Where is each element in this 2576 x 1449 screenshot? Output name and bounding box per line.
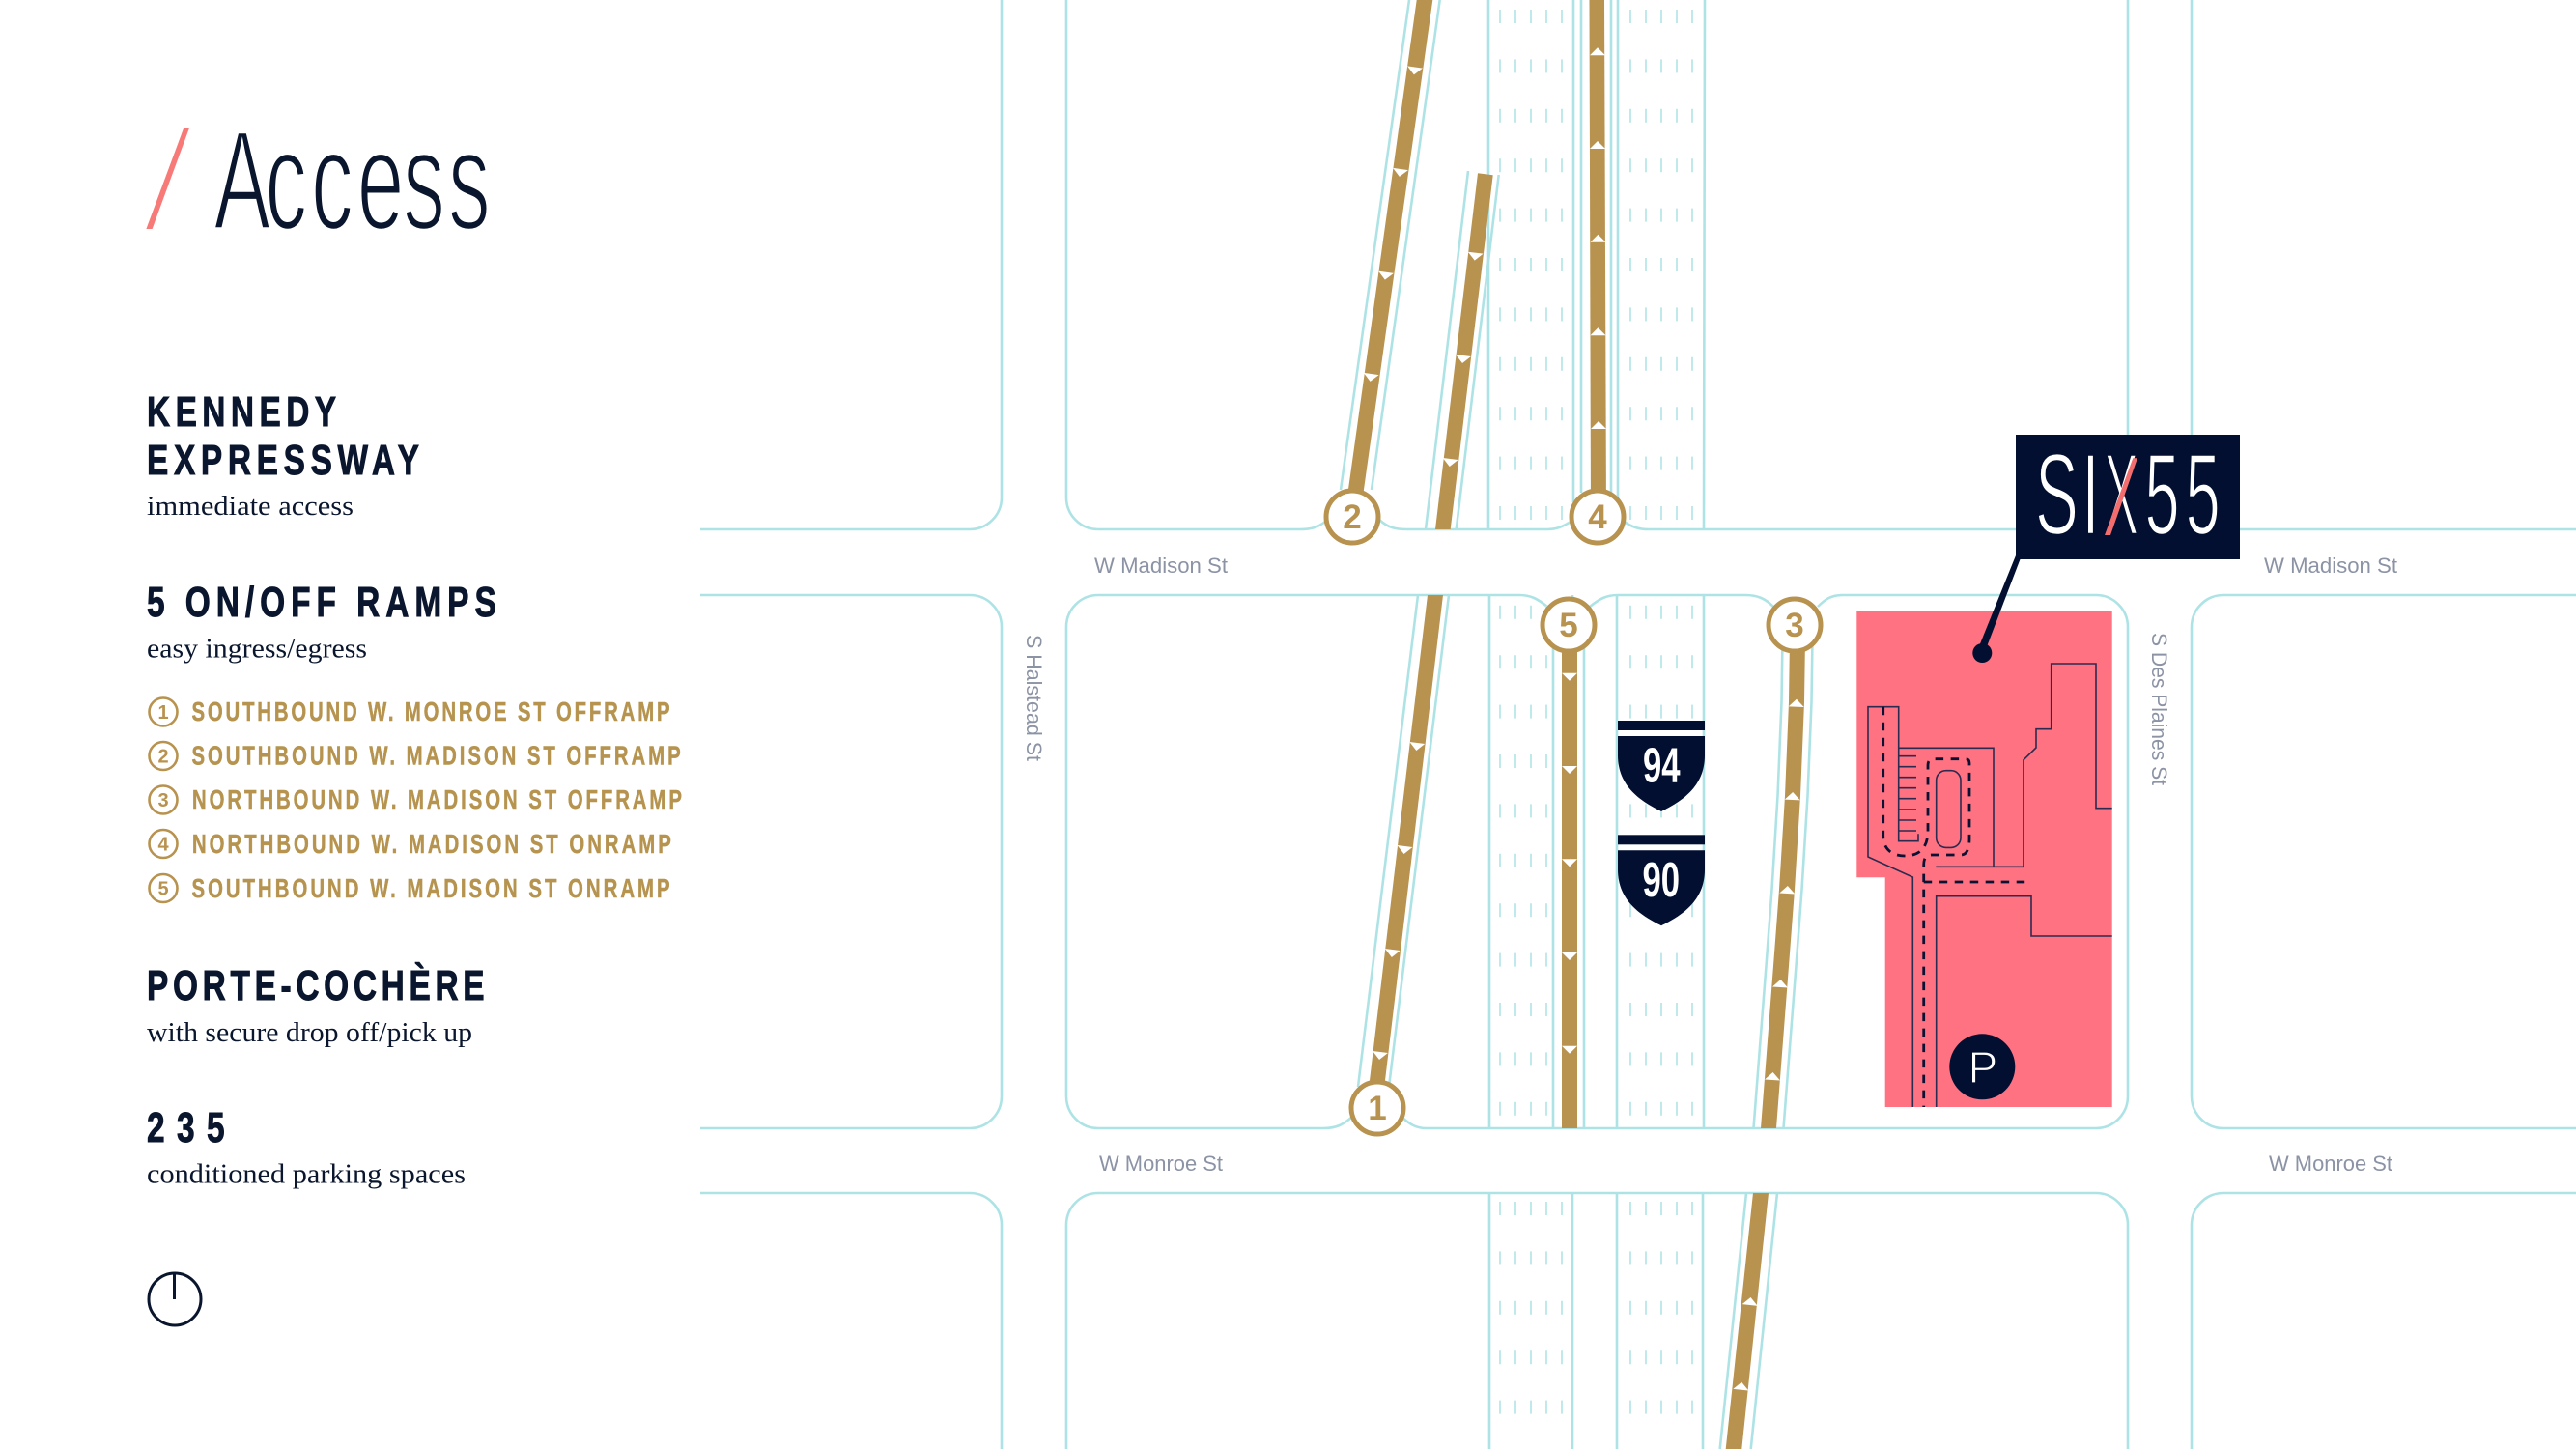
legend row 1: 1 xyxy=(157,702,169,724)
street label: W Madison St right: W Madison St xyxy=(2264,554,2398,578)
legend row 2: SOUTHBOUND W. MADISON ST OFFRAMP xyxy=(191,742,681,771)
block: Porte-cochere xyxy=(147,962,485,1048)
ramp marker 3: 3 xyxy=(1785,607,1804,644)
legend row 1: SOUTHBOUND W. MONROE ST OFFRAMP xyxy=(191,697,670,727)
interstate 90 shield: 90 xyxy=(1642,854,1680,908)
heading: 235 xyxy=(147,1105,225,1151)
street label: W Monroe St left: W Monroe St xyxy=(1099,1151,1224,1176)
SIX55 logo text xyxy=(2035,429,2221,559)
interstate 94 shield: 94 xyxy=(1643,739,1681,793)
logo coral stroke xyxy=(2105,458,2137,535)
ramp marker 4 xyxy=(1571,491,1624,543)
interstate 90 shield xyxy=(1618,835,1705,925)
caption: immediate access xyxy=(147,491,354,522)
ramp 3: northbound Madison offramp xyxy=(1761,638,1805,1128)
expressway lane dashes xyxy=(1500,10,1692,1449)
street label: S Halstead St: S Halstead St xyxy=(1022,635,1046,762)
block: 5 on/off ramps xyxy=(147,580,496,665)
ramp legend xyxy=(149,697,682,904)
ramp marker 3 xyxy=(1769,599,1821,651)
site plan xyxy=(1856,611,2112,1107)
ramp 5: southbound Madison onramp xyxy=(1562,628,1577,1128)
interstate 94 shield xyxy=(1618,721,1705,811)
ramp marker 5 xyxy=(1543,599,1595,651)
heading: KENNEDY xyxy=(147,389,336,436)
heading: 5 ON/OFF RAMPS xyxy=(147,580,496,626)
heading xyxy=(147,389,419,484)
street label: W Monroe St right: W Monroe St xyxy=(2269,1151,2393,1176)
parking icon xyxy=(1949,1034,2015,1099)
street map xyxy=(700,0,2576,1449)
SIX55 logo text: 55 xyxy=(2144,431,2221,559)
SIX55 logo text: SI xyxy=(2035,429,2100,559)
block: parking spaces xyxy=(147,1105,466,1190)
title xyxy=(146,101,491,260)
ramp marker 2 xyxy=(1326,491,1378,543)
ramp marker 4: 4 xyxy=(1588,498,1607,536)
legend row 4: NORTHBOUND W. MADISON ST ONRAMP xyxy=(192,830,671,860)
ramp 3 continuation south of Monroe xyxy=(1726,1193,1769,1449)
SIX55 callout xyxy=(1972,429,2240,663)
callout leader line xyxy=(1979,555,2021,649)
legend row 3: NORTHBOUND W. MADISON ST OFFRAMP xyxy=(192,785,682,815)
callout box xyxy=(2016,435,2240,559)
title text: Access xyxy=(214,101,491,260)
location dot xyxy=(1972,643,1992,663)
block: Kennedy Expressway xyxy=(147,389,419,522)
ramp marker 1: 1 xyxy=(1368,1090,1387,1127)
ramp marker 5: 5 xyxy=(1559,607,1578,644)
icon: power symbol xyxy=(149,1273,201,1325)
porte-cochere drive dashed path xyxy=(1883,707,2031,1107)
ramp segment: short offramp north of Madison xyxy=(1435,173,1493,529)
legend row 4: 4 xyxy=(157,835,169,856)
street label: S Des Plaines St: S Des Plaines St xyxy=(2147,633,2171,786)
legend row 2: 2 xyxy=(157,746,169,767)
SIX55 logo text: X xyxy=(2104,429,2138,559)
ramp marker 2: 2 xyxy=(1343,498,1362,536)
site footprint xyxy=(1856,611,2112,1107)
ramp 2: southbound Madison offramp xyxy=(1345,0,1432,517)
heading: EXPRESSWAY xyxy=(147,438,419,484)
ramp marker 1 xyxy=(1351,1082,1403,1134)
heading: PORTE-COCHÈRE xyxy=(147,962,485,1009)
ramp 1: southbound Monroe offramp xyxy=(1367,595,1443,1108)
building and driveway outlines xyxy=(1868,664,2112,1107)
caption: conditioned parking spaces xyxy=(147,1159,466,1190)
street label: W Madison St left: W Madison St xyxy=(1094,554,1229,578)
caption: easy ingress/egress xyxy=(147,634,367,665)
parking icon: P xyxy=(1968,1042,1997,1093)
city block outlines xyxy=(700,0,2576,1449)
expressway edges xyxy=(1488,0,1705,1449)
legend row 3: 3 xyxy=(157,790,169,811)
ramp 4: northbound Madison onramp xyxy=(1590,0,1606,517)
legend row 5: 5 xyxy=(157,879,169,900)
legend row 5: SOUTHBOUND W. MADISON ST ONRAMP xyxy=(191,874,670,904)
ramp edges xyxy=(1341,0,1812,1449)
title slash xyxy=(146,128,189,229)
caption: with secure drop off/pick up xyxy=(147,1017,472,1048)
